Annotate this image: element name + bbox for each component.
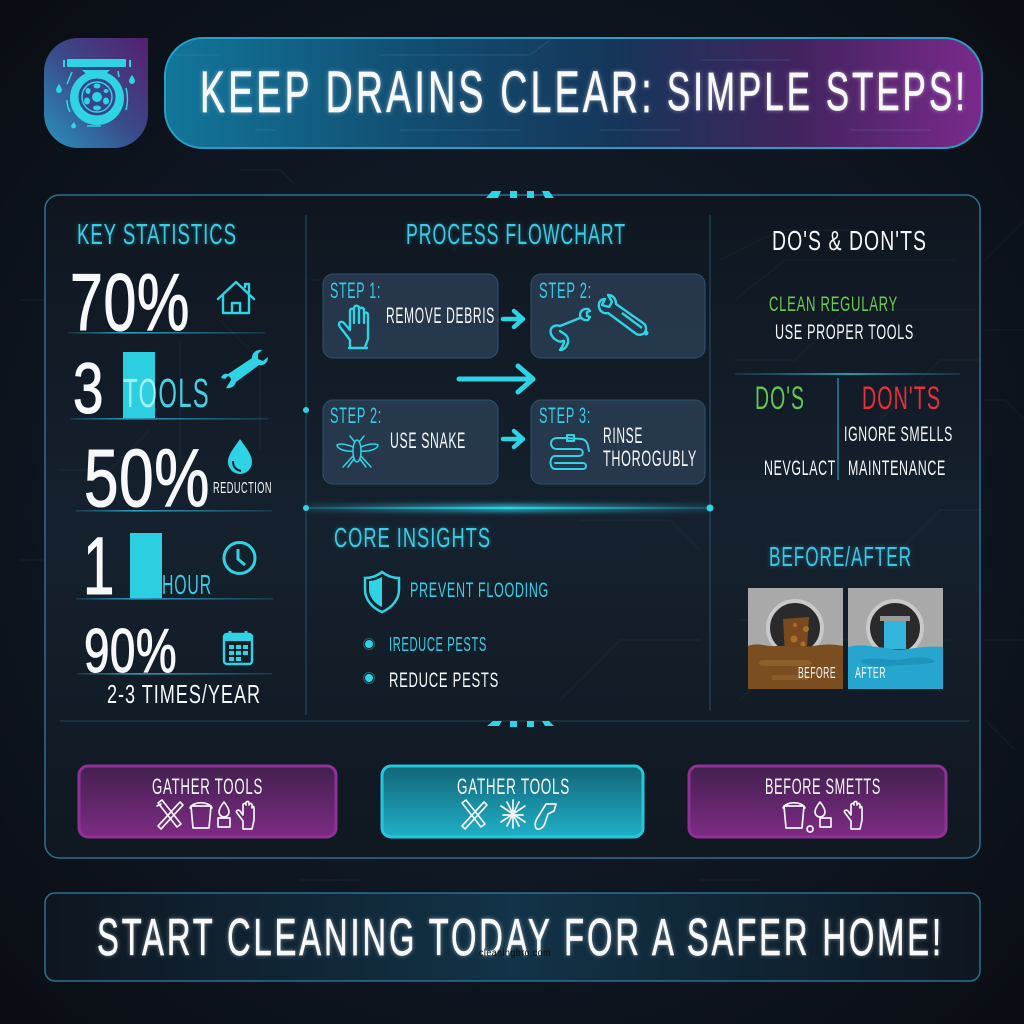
call to action banner	[45, 893, 980, 981]
image: before: BEFORE	[798, 665, 836, 682]
panel: core insights	[334, 522, 549, 692]
panel: do's and don'ts	[735, 225, 960, 480]
insight: prevent flooding: PREVENT FLOODING	[410, 579, 549, 602]
stat: 1 hour	[76, 521, 274, 612]
panel: key statistics	[68, 219, 274, 709]
step 2 card: tools: STEP 2:	[539, 278, 592, 303]
do: clean regularly: CLEAN REGULARY	[769, 293, 898, 316]
main panel	[45, 191, 980, 858]
panel: process flowchart	[323, 219, 705, 484]
stat: 90% 2-3 times per year	[77, 617, 272, 709]
step 2 card: use snake	[323, 400, 498, 484]
watermark: cleaningbro.com	[479, 948, 551, 959]
stat: 90% 2-3 times per year: 2-3 TIMES/YEAR	[107, 679, 261, 709]
title text: KEEP DRAINS CLEAR:	[200, 60, 655, 125]
button: gather tools teal	[382, 766, 643, 837]
step 1 card: STEP 1:	[330, 278, 381, 303]
step 1 card: REMOVE DEBRIS	[386, 303, 495, 328]
step 1 card	[323, 274, 498, 358]
heading: before/after: BEFORE/AFTER	[769, 541, 912, 572]
stat: 90% 2-3 times per year: 90%	[84, 617, 177, 686]
don't: neglect maintenance: MAINTENANCE	[848, 457, 946, 480]
arrow: step 2 to step 3	[503, 431, 523, 447]
stat: 1 hour: HOUR	[162, 569, 212, 600]
glowing divider	[303, 407, 714, 512]
stat: 50% reduction: 50%	[84, 433, 210, 524]
step 3 card: THOROGUBLY	[603, 446, 697, 471]
heading: process flowchart: PROCESS FLOWCHART	[406, 219, 626, 251]
button: gather tools teal: GATHER TOOLS	[457, 774, 570, 799]
stat: 50% reduction: REDUCTION	[213, 480, 272, 497]
step 2 card: use snake: USE SNAKE	[390, 428, 466, 453]
insight: reduce pests white	[364, 669, 499, 692]
step 2 card: use snake: STEP 2:	[330, 403, 382, 428]
heading: do's and don'ts: DO'S & DON'TS	[772, 225, 927, 256]
column label: don'ts: DON'TS	[862, 380, 941, 416]
don't: neglect maintenance	[764, 457, 946, 480]
button: gather tools purple: GATHER TOOLS	[152, 774, 263, 799]
stat: 3 tools	[70, 350, 268, 429]
button: before smells purple	[689, 766, 946, 837]
panel: before and after	[748, 541, 943, 689]
stat: 1 hour: 1	[83, 521, 115, 612]
title banner	[165, 38, 982, 148]
stat: 70%: 70%	[70, 258, 190, 348]
insight: reduce pests cyan: IREDUCE PESTS	[389, 634, 487, 656]
heading: core insights: CORE INSIGHTS	[334, 522, 491, 553]
image: after	[848, 588, 943, 689]
step 3 card: STEP 3:	[539, 403, 591, 428]
step 3 card	[531, 400, 705, 484]
stat: 3 tools: 3	[73, 350, 104, 429]
top notch	[486, 191, 554, 198]
icon: shield	[365, 572, 399, 612]
arrow: step 1 to step 2	[503, 311, 523, 327]
image: before	[748, 588, 843, 689]
step 2 card: tools	[531, 274, 705, 358]
stat: 3 tools: TOOLS	[123, 370, 210, 416]
arrow: long connector	[459, 366, 533, 392]
don't: neglect maintenance: NEVGLACT	[764, 457, 836, 480]
step 3 card: RINSE	[603, 423, 643, 448]
do: use proper tools: USE PROPER TOOLS	[775, 321, 914, 344]
heading: key statistics: KEY STATISTICS	[77, 219, 237, 251]
button: gather tools purple	[79, 766, 336, 837]
header icon: drain	[44, 38, 148, 148]
image: after: AFTER	[855, 665, 886, 682]
column label: do's: DO'S	[755, 380, 805, 416]
button: before smells purple: BEFORE SMETTS	[765, 774, 881, 799]
insight: reduce pests cyan	[364, 634, 487, 656]
insight: reduce pests white: REDUCE PESTS	[389, 669, 499, 692]
